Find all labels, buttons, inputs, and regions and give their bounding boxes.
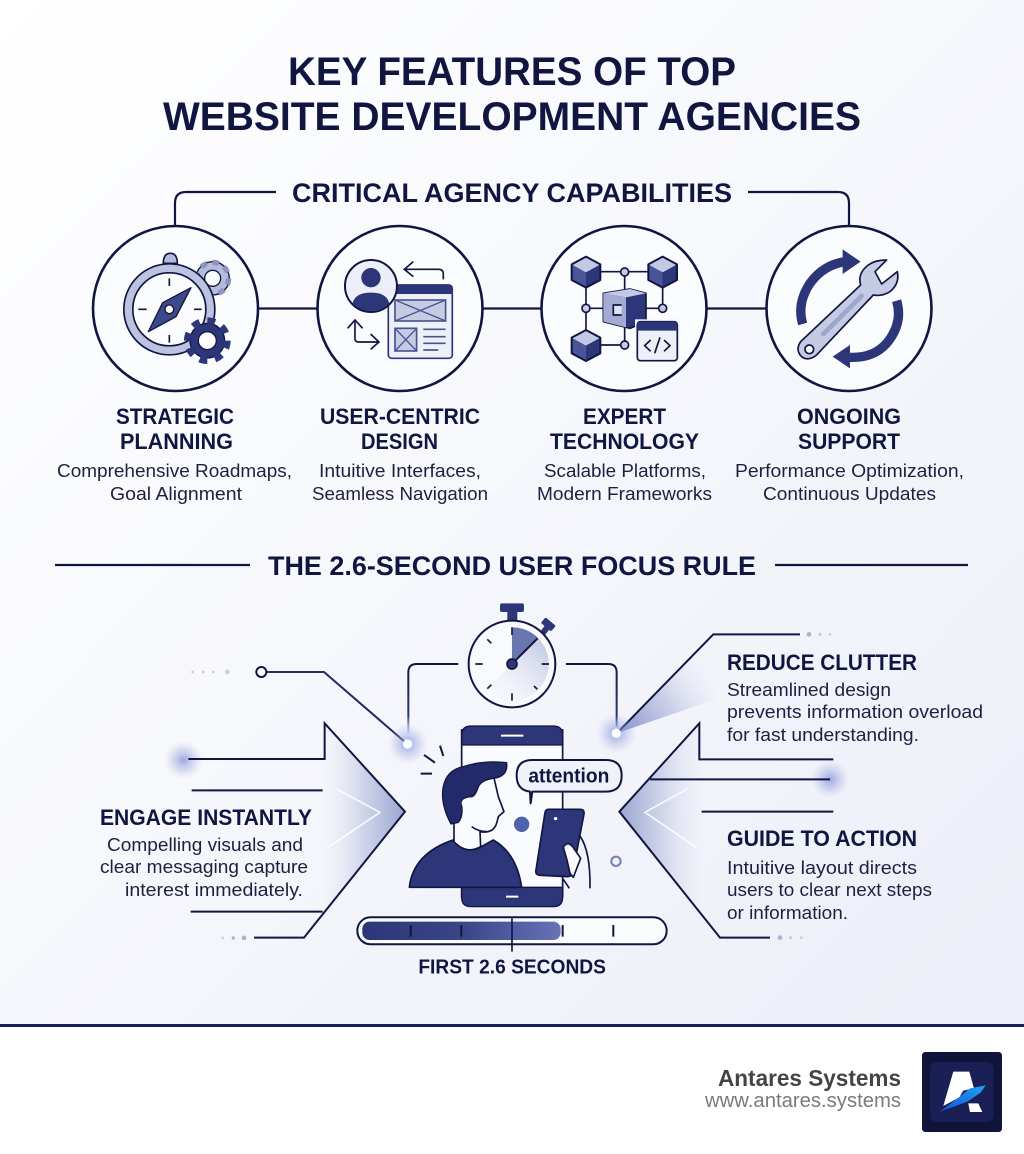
brackets	[408, 664, 617, 733]
footer brand text: www.antares.systems	[704, 1090, 901, 1112]
heading: critical agency capabilities: CRITICAL AGENCY CAPABILITIES	[292, 178, 732, 208]
stopwatch	[469, 603, 556, 707]
connection nodes	[403, 729, 621, 749]
label: strategic planning: PLANNING	[120, 429, 233, 454]
glow right	[596, 713, 637, 754]
attention marks	[421, 746, 443, 774]
callout: reduce clutter: for fast understanding.	[727, 724, 919, 745]
callout: reduce clutter: Streamlined design	[727, 679, 891, 700]
icon: network of cubes and code window	[572, 257, 680, 363]
footer brand text: Antares Systems	[718, 1065, 901, 1091]
icon: wrench with refresh arrows	[798, 249, 899, 368]
logo	[922, 1052, 1002, 1132]
description: expert technology: Scalable Platforms,	[544, 460, 706, 481]
progress bar	[357, 917, 667, 952]
connector lines between capability circles	[175, 192, 849, 308]
description: strategic planning: Goal Alignment	[110, 483, 242, 504]
right arrow: reduce clutter and guide to action	[617, 632, 849, 940]
label: ongoing support: ONGOING	[797, 404, 901, 429]
description: ongoing support	[735, 460, 964, 504]
label: strategic planning	[116, 404, 234, 454]
label: user-centric design	[320, 404, 480, 454]
label: expert technology: EXPERT	[583, 404, 667, 429]
person	[409, 762, 522, 887]
ring dot	[611, 857, 621, 866]
left arrow: engage instantly	[164, 667, 407, 940]
footer brand text	[704, 1065, 901, 1112]
label: user-centric design: USER-CENTRIC	[320, 404, 480, 429]
description: expert technology: Modern Frameworks	[537, 483, 712, 504]
description: strategic planning: Comprehensive Roadmaps,	[57, 460, 292, 481]
description: strategic planning	[57, 460, 292, 504]
label: strategic planning: STRATEGIC	[116, 404, 234, 429]
description: ongoing support: Performance Optimization,	[735, 460, 964, 481]
callout: guide to action: or information.	[727, 902, 848, 923]
speech bubble	[517, 760, 622, 803]
speech bubble: attention	[528, 764, 609, 787]
panel: ongoing support	[735, 226, 964, 504]
phone background	[462, 726, 563, 907]
label: user-centric design: DESIGN	[361, 429, 438, 454]
icon: user and wireframe	[345, 260, 452, 358]
label: expert technology: TECHNOLOGY	[550, 429, 699, 454]
panel: strategic planning	[57, 226, 292, 504]
glow left	[387, 723, 428, 765]
icon: compass with gears	[128, 253, 229, 361]
glow	[164, 741, 203, 779]
heading: the 2.6-second user focus rule: THE 2.6-SECOND USER FOCUS RULE	[268, 551, 756, 581]
light cone	[617, 634, 727, 733]
label: ongoing support: SUPPORT	[798, 429, 901, 454]
callout: engage instantly	[100, 805, 312, 900]
callout: guide to action: Intuitive layout directs	[727, 857, 917, 878]
central illustration: stopwatch, phone, person	[357, 603, 667, 978]
description: user-centric design: Seamless Navigation	[312, 483, 488, 504]
description: user-centric design	[312, 460, 488, 504]
hand holding phone	[536, 809, 590, 888]
footer band	[0, 1024, 1024, 1154]
title	[163, 50, 861, 139]
callout: engage instantly: Compelling visuals and	[107, 834, 303, 855]
callout: reduce clutter: prevents information overload	[727, 701, 983, 722]
title: WEBSITE DEVELOPMENT AGENCIES	[163, 95, 861, 139]
callout: guide to action: GUIDE TO ACTION	[727, 826, 917, 851]
label: ongoing support	[797, 404, 901, 454]
label: expert technology	[550, 404, 699, 454]
description: user-centric design: Intuitive Interfaces,	[319, 460, 481, 481]
title: KEY FEATURES OF TOP	[288, 50, 736, 94]
progress label: FIRST 2.6 SECONDS	[418, 956, 606, 978]
description: ongoing support: Continuous Updates	[763, 483, 936, 504]
callout: engage instantly: interest immediately.	[125, 879, 303, 900]
description: expert technology	[537, 460, 712, 504]
callout: engage instantly: ENGAGE INSTANTLY	[100, 805, 312, 830]
callout: guide to action	[727, 826, 932, 923]
callout: engage instantly: clear messaging capture	[100, 856, 308, 877]
callout: guide to action: users to clear next steps	[727, 879, 932, 900]
panel: user-centric design	[312, 226, 488, 504]
callout: reduce clutter: REDUCE CLUTTER	[727, 650, 917, 675]
floating dot	[514, 817, 529, 832]
panel: expert technology	[537, 226, 712, 504]
callout: reduce clutter	[727, 650, 983, 745]
